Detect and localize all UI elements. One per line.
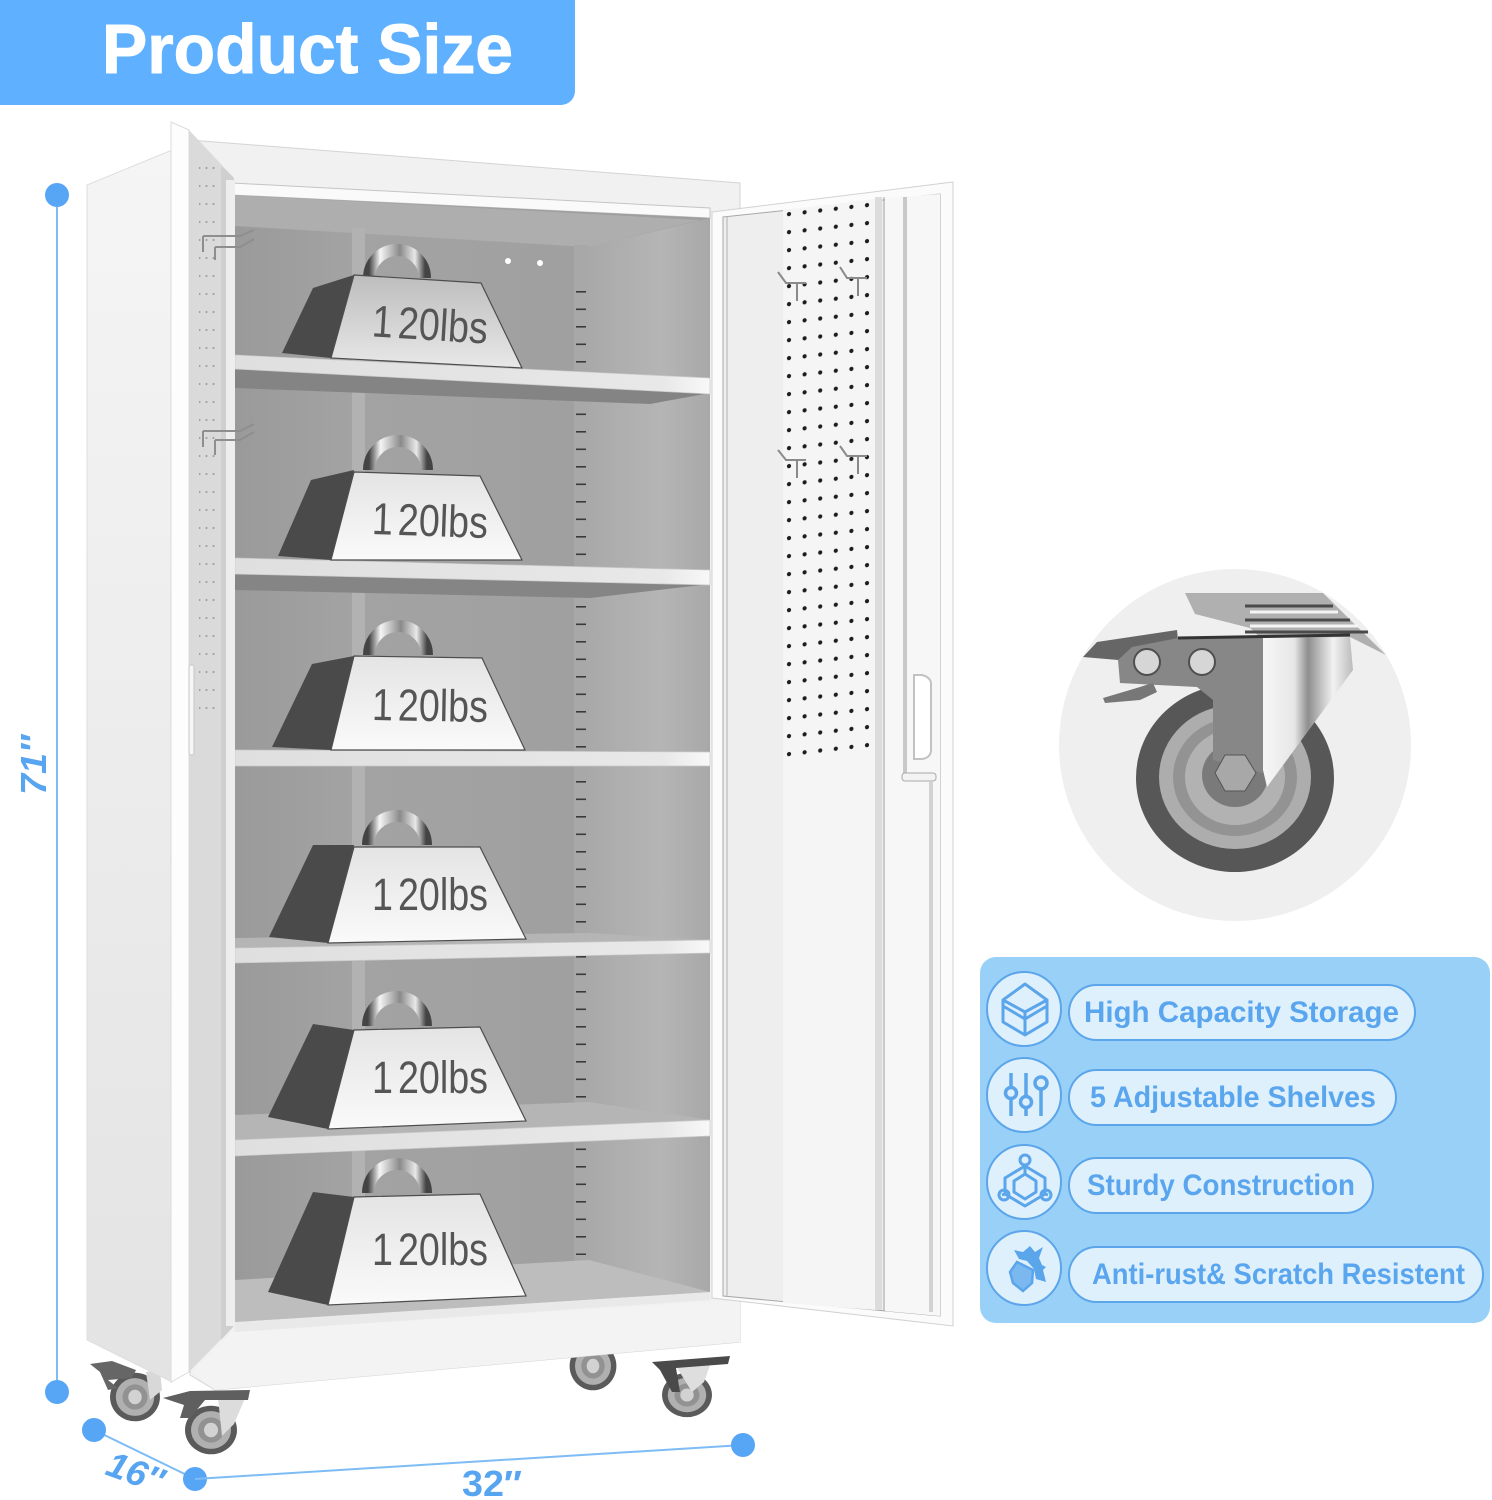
fork top edge bbox=[1178, 635, 1350, 638]
door inner panel bbox=[723, 194, 940, 1316]
top mounting plate bbox=[1185, 593, 1386, 655]
label pill: High Capacity Storage bbox=[1084, 996, 1399, 1029]
label pill: Sturdy Construction bbox=[1087, 1169, 1355, 1202]
fork silver face bbox=[1263, 637, 1353, 787]
plate highlights bbox=[1250, 612, 1358, 626]
door inner shadow line bbox=[726, 217, 728, 1296]
body frame post bbox=[226, 180, 235, 1326]
caster: rear right bbox=[570, 1342, 616, 1390]
label pill bbox=[1069, 985, 1415, 1040]
door frame edge bbox=[221, 166, 234, 1340]
rear and front casters bbox=[90, 1342, 730, 1454]
dimension: depth 16 inches: 16″ bbox=[101, 1443, 171, 1500]
door inner panel bbox=[189, 130, 234, 1372]
caster: front right bbox=[652, 1356, 730, 1417]
left upright bbox=[352, 228, 365, 1288]
left door hooks top bbox=[203, 230, 254, 260]
cabinet interior bbox=[235, 195, 710, 1332]
heading banner: Product Size bbox=[0, 0, 575, 105]
pegboard holes bbox=[783, 196, 875, 768]
dimension: width 32 inches bbox=[195, 1433, 755, 1500]
cabinet body bbox=[87, 122, 740, 1390]
door right panel bbox=[885, 194, 940, 1316]
left side panel bbox=[87, 150, 172, 1382]
wheel hub inner bbox=[1185, 729, 1285, 825]
wheel rim bbox=[1159, 705, 1311, 849]
left door bbox=[171, 122, 254, 1382]
plate dark bands bbox=[1245, 606, 1368, 632]
label pill: 5 Adjustable Shelves bbox=[1090, 1081, 1376, 1114]
fork dark side bbox=[1118, 638, 1263, 773]
slot marks bbox=[576, 285, 586, 1255]
shelf 3 bbox=[235, 750, 710, 766]
dimension: height 71 inches: 71″ bbox=[13, 733, 54, 795]
icon: hex structure bbox=[987, 1145, 1061, 1219]
ceiling bbox=[235, 195, 700, 247]
weight 1: 120lbs: 120lbs bbox=[371, 296, 489, 353]
feature: sturdy construction bbox=[987, 1145, 1373, 1219]
right side wall bbox=[589, 218, 710, 1298]
door ridge bbox=[875, 197, 884, 1311]
back wall bbox=[235, 195, 710, 1328]
weight 6: 120lbs: 120lbs bbox=[372, 1224, 488, 1275]
weight 4: 120lbs: 120lbs bbox=[372, 869, 488, 920]
hook lower left bbox=[778, 450, 806, 478]
shelf 1 bbox=[235, 355, 710, 404]
vent holes bbox=[505, 258, 543, 266]
feature: high capacity storage bbox=[987, 972, 1415, 1046]
weight 2: 120lbs bbox=[278, 441, 522, 560]
shelf 4 bbox=[235, 933, 710, 963]
caster detail circle bbox=[1059, 569, 1411, 921]
wheel hub bbox=[1173, 718, 1297, 836]
weight 4: 120lbs bbox=[269, 816, 526, 943]
hook top left bbox=[778, 272, 806, 301]
feature: 5 adjustable shelves bbox=[987, 1058, 1396, 1132]
floor bbox=[235, 1260, 710, 1322]
brake lever bbox=[1083, 630, 1178, 660]
label pill bbox=[1069, 1158, 1373, 1213]
weight 3: 120lbs: 120lbs bbox=[372, 679, 488, 732]
weight 3: 120lbs bbox=[272, 626, 525, 750]
weight 1: 120lbs bbox=[282, 250, 522, 368]
label pill: Anti-rust& Scratch Resistent bbox=[1092, 1258, 1465, 1291]
floor lip bbox=[235, 1292, 710, 1332]
shelf 2 bbox=[235, 558, 710, 598]
door latch bbox=[902, 773, 936, 781]
dimension: depth 16 inches bbox=[82, 1418, 207, 1500]
right door bbox=[712, 182, 953, 1326]
brake tab bbox=[1103, 683, 1157, 703]
wheel tyre bbox=[1136, 684, 1334, 872]
circle background bbox=[1059, 569, 1411, 921]
icon: sliders bbox=[987, 1058, 1061, 1132]
door stile rod bbox=[929, 782, 933, 1312]
rivet right bbox=[1189, 649, 1215, 675]
left door hooks lower bbox=[203, 424, 254, 455]
door outer edge bbox=[171, 122, 189, 1382]
icon: box bbox=[987, 972, 1061, 1046]
cabinet front frame bbox=[190, 140, 740, 1390]
shelf 5 bbox=[235, 1102, 710, 1156]
feature: anti-rust and scratch resistant bbox=[987, 1231, 1483, 1305]
caster: rear left bbox=[90, 1361, 162, 1421]
pegboard panel bbox=[783, 199, 875, 1310]
door channel bbox=[903, 197, 907, 777]
hex bolt bbox=[1215, 755, 1256, 791]
label pill bbox=[1069, 1247, 1483, 1302]
hook top right bbox=[840, 267, 867, 296]
left door pegboard bbox=[199, 160, 219, 720]
icon: shield and splash bbox=[987, 1231, 1061, 1305]
caster: front left bbox=[163, 1390, 250, 1454]
heading banner: Product Size: Product Size bbox=[102, 10, 513, 88]
label pill bbox=[1069, 1070, 1396, 1125]
door frame bbox=[712, 182, 953, 1326]
bolt seat bbox=[1202, 743, 1268, 807]
weight 6: 120lbs bbox=[268, 1164, 526, 1305]
door handle bbox=[914, 675, 931, 759]
rivet left bbox=[1134, 649, 1160, 675]
door handle edge bbox=[189, 665, 194, 755]
weight 5: 120lbs: 120lbs bbox=[372, 1052, 488, 1103]
weight 2: 120lbs: 120lbs bbox=[371, 493, 489, 548]
top header strip bbox=[232, 183, 710, 218]
panel background bbox=[980, 957, 1490, 1323]
weight 5: 120lbs bbox=[268, 997, 526, 1129]
dimension: height 71 inches bbox=[13, 183, 69, 1404]
features panel bbox=[980, 957, 1490, 1323]
hook lower right bbox=[840, 446, 867, 474]
right upright with slots bbox=[574, 245, 589, 1263]
bottom kick plate bbox=[192, 1300, 740, 1390]
